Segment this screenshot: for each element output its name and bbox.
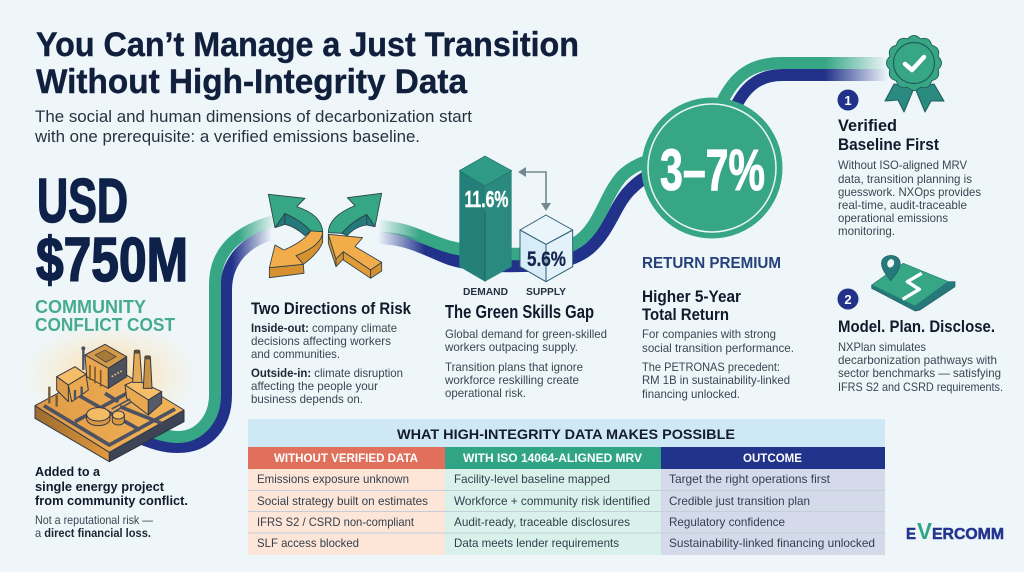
number badge 2	[838, 288, 858, 310]
heading: higher 5-year total return: Higher 5-Year	[642, 287, 741, 306]
text: green skills description: Global demand for green-skilled	[445, 327, 607, 341]
icon: verified badge	[885, 35, 944, 112]
table body: Emissions exposure unknown	[257, 472, 409, 486]
text: verified baseline description	[838, 158, 981, 238]
table column headers: WITH ISO 14064-ALIGNED MRV	[463, 451, 642, 465]
ribbon: return circle to badge	[722, 63, 888, 106]
bar labels: SUPPLY	[526, 286, 566, 298]
chart: demand bar 11.6%: 11.6%	[464, 186, 508, 212]
arrow: gap between demand and supply	[518, 167, 551, 211]
stat label: community conflict cost: CONFLICT COST	[35, 315, 175, 335]
ribbon: factory to risk arrows	[140, 220, 278, 447]
number badge 1: 1	[844, 93, 852, 108]
logo: Evercomm	[906, 518, 1004, 544]
table body: Workforce + community risk identified	[454, 494, 650, 508]
table body: IFRS S2 / CSRD non-compliant	[257, 515, 415, 529]
table body: SLF access blocked	[257, 536, 359, 550]
text: green skills description: workers outpacing supply.	[444, 340, 578, 354]
icon: map with location pin	[872, 255, 955, 311]
heading: the green skills gap: The Green Skills Gap	[445, 302, 594, 322]
text: verified baseline description: operational emissions	[838, 211, 948, 225]
table body	[248, 469, 885, 555]
text: verified baseline description: Without ISO-aligned MRV	[838, 158, 967, 172]
headline stat: USD $750M: USD	[37, 167, 128, 236]
text: return premium description: social transition performance.	[642, 341, 794, 355]
stat circle: 3-7%	[642, 98, 782, 238]
table column headers	[248, 447, 885, 469]
table body: Social strategy built on estimates	[257, 494, 428, 508]
stat label: community conflict cost: COMMUNITY	[35, 297, 146, 317]
table title band: WHAT HIGH-INTEGRITY DATA MAKES POSSIBLE	[397, 426, 735, 442]
headline stat: USD $750M: $750M	[36, 226, 188, 295]
logo: Evercomm: E	[906, 526, 916, 543]
text: inside-out and outside-in: and communities.	[251, 347, 340, 361]
text: model plan disclose description: decarbonization pathways with	[838, 353, 997, 367]
icon: two directions of risk arrows	[268, 193, 382, 278]
text: model plan disclose description	[838, 340, 1003, 394]
table body: Data meets lender requirements	[454, 536, 619, 550]
text: added to a single energy project: Not a reputational risk —	[35, 513, 153, 527]
heading: verified baseline first: Verified	[838, 116, 897, 135]
text: verified baseline description: data, transition planning is	[838, 172, 972, 186]
table column headers: OUTCOME	[743, 451, 802, 465]
text: inside-out and outside-in: affecting the people your	[251, 379, 378, 393]
table body: Target the right operations first	[669, 472, 831, 486]
number badge 2: 2	[844, 292, 852, 307]
heading: verified baseline first: Baseline First	[838, 135, 939, 154]
table title band	[248, 419, 885, 447]
bar labels: DEMAND	[463, 286, 508, 298]
stat circle: 3-7%: 3–7%	[660, 138, 765, 203]
number badge 1	[838, 90, 858, 110]
logo: Evercomm: ERCOMM	[932, 526, 1004, 543]
text: added to a single energy project: single energy project	[35, 480, 165, 494]
table body: Credible just transition plan	[669, 494, 810, 508]
title: You Can’t Manage a Just Transition	[36, 26, 579, 64]
title	[36, 26, 579, 101]
label: return premium: RETURN PREMIUM	[642, 255, 781, 272]
text: return premium description: RM 1B in sustainability-linked	[642, 373, 790, 387]
table body: Audit-ready, traceable disclosures	[454, 515, 630, 529]
text: added to a single energy project	[35, 465, 188, 540]
text: inside-out and outside-in	[251, 321, 403, 406]
chart: supply cube 5.6%	[520, 215, 573, 282]
table body: Facility-level baseline mapped	[454, 472, 610, 486]
text: added to a single energy project: from community conflict.	[35, 494, 188, 508]
text: return premium description: For companies with strong	[642, 327, 776, 341]
bar labels	[463, 286, 566, 298]
headline stat: USD $750M	[36, 167, 188, 295]
heading: two directions of risk: Two Directions of Risk	[251, 299, 411, 318]
stat label: community conflict cost	[35, 297, 175, 335]
text: inside-out and outside-in: Outside-in: climate disruption	[251, 366, 403, 380]
ribbon: risk arrows to return circle	[378, 160, 652, 266]
text: inside-out and outside-in: Inside-out: company climate	[251, 321, 397, 335]
left building	[57, 367, 86, 385]
text: model plan disclose description: NXPlan simulates	[838, 340, 926, 354]
text: return premium description: The PETRONAS precedent:	[642, 360, 780, 374]
text: inside-out and outside-in: decisions affecting workers	[251, 334, 391, 348]
subtitle: The social and human dimensions of decarbonization start	[35, 107, 472, 126]
subtitle: with one prerequisite: a verified emissions baseline.	[34, 127, 420, 146]
chart: demand bar 11.6%	[459, 156, 512, 282]
text: green skills description: Transition plans that ignore	[445, 360, 583, 374]
text: model plan disclose description: IFRS S2 and CSRD requirements.	[838, 380, 1003, 394]
text: verified baseline description: guesswork. NXOps provides	[838, 185, 981, 199]
heading: verified baseline first	[838, 116, 939, 154]
text: verified baseline description: real-time, audit-traceable	[838, 198, 967, 212]
right building	[125, 380, 162, 400]
chimneys	[133, 351, 142, 382]
tanks	[87, 414, 110, 426]
text: green skills description: workforce reskilling create	[444, 373, 579, 387]
heading: higher 5-year total return	[642, 287, 741, 324]
title: Without High-Integrity Data	[36, 63, 468, 101]
text: verified baseline description: monitoring.	[838, 224, 895, 238]
text: added to a single energy project: Added to a	[35, 465, 101, 479]
chart: supply cube 5.6%: 5.6%	[527, 248, 566, 271]
table body: Sustainability-linked financing unlocked	[669, 536, 875, 550]
text: return premium description: financing unlocked.	[642, 387, 740, 401]
text: return premium description	[642, 327, 794, 401]
text: added to a single energy project: a direct financial loss.	[35, 526, 151, 540]
table body: Regulatory confidence	[669, 515, 785, 529]
text: inside-out and outside-in: business depends on.	[251, 392, 363, 406]
table: what high-integrity data makes possible	[248, 419, 885, 555]
icon: isometric energy facility	[25, 330, 195, 462]
logo: Evercomm: V	[917, 518, 933, 544]
text: model plan disclose description: sector benchmarks — satisfying	[838, 366, 1001, 380]
heading: model plan disclose: Model. Plan. Disclose.	[838, 317, 995, 336]
subtitle	[34, 107, 472, 146]
main block	[85, 344, 127, 368]
text: green skills description	[444, 327, 607, 400]
text: green skills description: operational risk.	[445, 386, 526, 400]
heading: higher 5-year total return: Total Return	[642, 305, 729, 324]
table column headers: WITHOUT VERIFIED DATA	[274, 451, 418, 465]
